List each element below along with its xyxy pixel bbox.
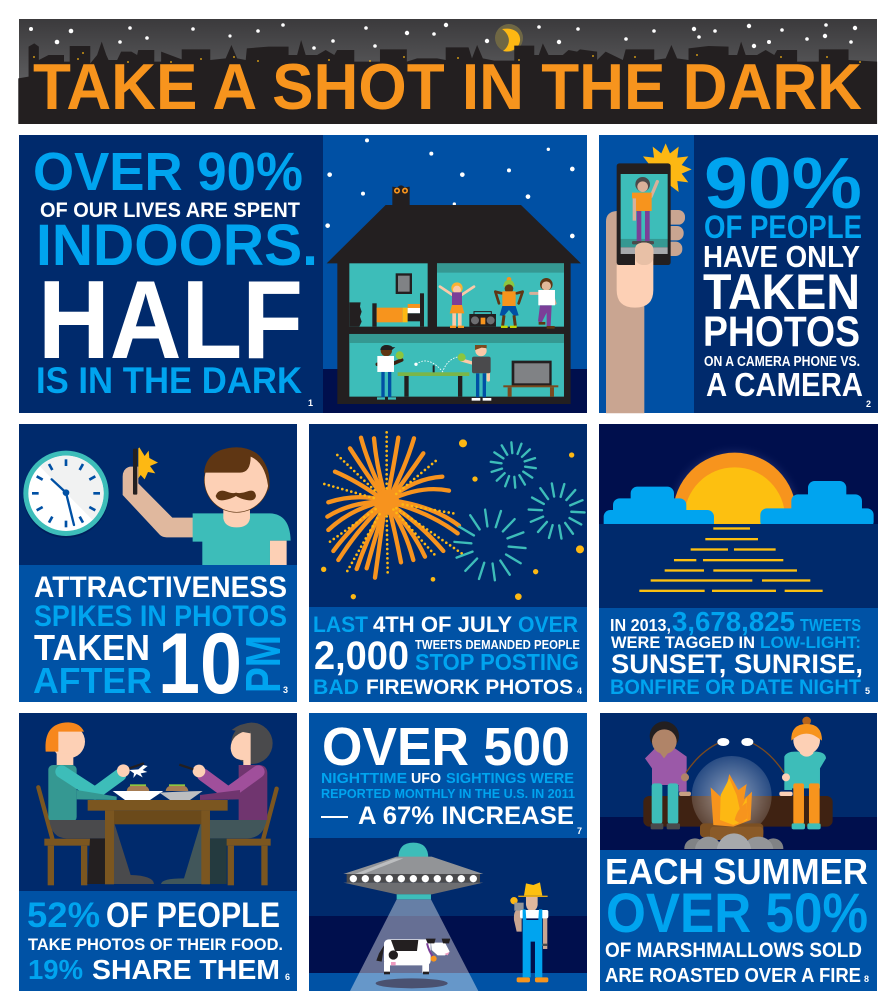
flash burst — [640, 143, 692, 195]
panel 7 text: NIGHTTIME — [321, 771, 407, 787]
panel 8 text: OF MARSHMALLOWS SOLD — [605, 939, 862, 962]
stars — [29, 23, 857, 50]
panel 3 text: 10 — [158, 616, 242, 712]
panel 2 text: 2 — [866, 399, 871, 409]
house — [327, 205, 581, 404]
panel 4 text: FIREWORK PHOTOS — [366, 675, 573, 699]
reflection lines — [639, 527, 823, 592]
panel 2: camera phone — [599, 135, 878, 413]
dinner illustration — [38, 722, 277, 885]
panel 2 text: PHOTOS — [703, 308, 860, 356]
UFO — [343, 843, 483, 899]
torso — [193, 513, 291, 565]
icon: crescent moon — [495, 24, 523, 52]
sun — [674, 450, 796, 524]
panel 1 text: OF OUR LIVES ARE SPENT — [40, 199, 300, 222]
panel 5 text: 3,678,825 — [672, 606, 795, 637]
panel 1 text: INDOORS. — [36, 213, 318, 278]
light beam — [350, 899, 478, 991]
dancing girl — [440, 282, 474, 328]
panel 8 text: OVER 50% — [606, 881, 868, 944]
rooms — [349, 263, 564, 397]
panel 8 text: 8 — [864, 974, 869, 984]
fire glow — [692, 756, 772, 836]
ping pong table — [398, 357, 469, 397]
panel 1 text: HALF — [38, 258, 303, 382]
fireworks illustration — [321, 432, 586, 600]
panel 6 text — [27, 896, 290, 985]
yellow sparks — [321, 439, 584, 600]
selfie person — [632, 177, 657, 244]
icon: wall clock — [23, 451, 109, 538]
teal bursts — [451, 440, 586, 583]
panel 5 text: TWEETS — [800, 615, 861, 635]
icon: boombox — [469, 312, 496, 327]
panel 2 text: HAVE ONLY — [703, 239, 860, 274]
panel 3 text: AFTER — [33, 660, 152, 701]
panel 3 text: PM — [237, 635, 291, 693]
plates of food — [113, 784, 203, 800]
panel 6 text: 19% — [28, 954, 83, 985]
woman diner — [161, 723, 273, 884]
panel 6 text: 6 — [285, 972, 290, 982]
night stars — [325, 138, 575, 238]
panel 4 text: OVER — [518, 612, 578, 637]
phone — [617, 163, 671, 265]
neck — [223, 503, 250, 527]
panel 5 text — [610, 606, 870, 699]
head — [204, 447, 270, 513]
icon: owl — [392, 185, 410, 206]
sunset illustration — [599, 443, 878, 592]
panel 6 text: SHARE THEM — [92, 954, 280, 985]
flash spark — [129, 765, 148, 778]
table — [88, 800, 228, 884]
panel 7 text: A 67% INCREASE — [358, 802, 574, 830]
panel 5: sunset — [599, 424, 878, 702]
panel 3 text: ATTRACTIVENESS — [34, 571, 287, 604]
panel 4 text: BAD — [313, 675, 359, 699]
panel 4 text — [313, 612, 582, 699]
television — [503, 361, 558, 397]
panel 2 text: ON A CAMERA PHONE VS. — [704, 354, 860, 370]
panel 1 text — [33, 142, 318, 408]
panel 5 text: 5 — [865, 686, 870, 696]
fingers — [665, 210, 685, 256]
arm and hand — [123, 467, 194, 537]
clouds — [604, 481, 874, 530]
dotted yellow rays — [324, 432, 462, 572]
flames — [711, 774, 752, 827]
person left — [645, 721, 729, 829]
panel 7 text: UFO — [411, 771, 441, 787]
panel 6 text: 52% — [27, 896, 100, 935]
panel 8: campfire — [600, 713, 877, 991]
orange burst — [327, 438, 459, 578]
panel 5 text: WERE TAGGED IN — [611, 633, 755, 652]
panel 7 text: REPORTED MONTHLY IN THE U.S. IN 2011 — [321, 786, 575, 801]
person right — [741, 717, 826, 829]
panel 1 text: IS IN THE DARK — [36, 360, 302, 401]
panel 8 text: ARE ROASTED OVER A FIRE — [605, 964, 861, 987]
panel 2 text: TAKEN — [703, 264, 860, 320]
panel 8 text: EACH SUMMER — [605, 851, 868, 892]
panel 3 text: SPIKES IN PHOTOS — [34, 600, 287, 633]
campfire illustration — [643, 716, 833, 849]
hand with phone illustration — [606, 143, 692, 413]
panel 1 text: OVER 90% — [33, 142, 303, 202]
farmer — [510, 882, 548, 982]
phone — [133, 449, 137, 495]
burst core — [374, 490, 399, 515]
selfie man illustration — [23, 447, 291, 565]
chairs — [38, 787, 277, 885]
panel 7 text: 7 — [577, 826, 582, 836]
panel 6 text: TAKE PHOTOS OF THEIR FOOD. — [28, 935, 283, 954]
panel 3 text: TAKEN — [34, 627, 150, 668]
panel 3 text — [33, 571, 291, 712]
bedroom furniture — [349, 273, 424, 327]
panel 8 text — [605, 851, 869, 987]
city skyline — [18, 40, 877, 124]
rocks — [684, 833, 784, 849]
panel 5 text: SUNSET, SUNRISE, — [611, 649, 863, 679]
panel 5 text: IN 2013, — [610, 615, 671, 635]
panel 3: attractiveness — [19, 424, 297, 712]
panel 4 text: 2,000 — [314, 634, 409, 678]
panel 2 text — [703, 144, 871, 409]
panel 7: UFO — [309, 713, 587, 991]
house illustration — [325, 138, 581, 404]
man diner — [45, 722, 154, 884]
dancing man in white shirt — [531, 278, 555, 329]
bench log — [643, 796, 833, 827]
player with cap — [377, 345, 404, 400]
panel 4 text: LAST — [313, 612, 369, 637]
thumb and palm — [617, 243, 653, 308]
firewood — [700, 823, 763, 840]
forearm — [606, 211, 644, 413]
panel 4 text: TWEETS DEMANDED PEOPLE — [415, 638, 580, 652]
flash — [138, 447, 158, 479]
panel 7 text — [321, 717, 582, 836]
panel 2 text: A CAMERA — [706, 366, 863, 403]
panel 2 text: 90% — [704, 144, 862, 224]
UFO scene illustration — [343, 843, 548, 991]
panel 5 text: LOW-LIGHT: — [760, 633, 861, 652]
panel 1: indoors — [19, 135, 587, 413]
player in grey shirt — [458, 345, 491, 401]
panel 4 text: 4TH OF JULY — [373, 612, 512, 637]
panel 7 text: OVER 500 — [322, 717, 570, 777]
panel 3 text: 3 — [283, 685, 288, 695]
title: TAKE A SHOT IN THE DARK — [33, 50, 862, 123]
panel 4: fireworks — [309, 424, 587, 702]
panel 4 text: 4 — [577, 686, 582, 696]
panel 6 text: OF PEOPLE — [106, 896, 280, 935]
panel 6: food — [19, 713, 297, 991]
panel 4 text: STOP POSTING — [415, 649, 579, 675]
header banner — [18, 19, 877, 124]
panel 1 text: 1 — [308, 398, 313, 408]
panel 7 text: SIGHTINGS WERE — [446, 771, 574, 787]
dancing man in green hat — [495, 277, 523, 328]
panel 2 text: OF PEOPLE — [704, 209, 862, 245]
panel 5 text: BONFIRE OR DATE NIGHT — [610, 676, 861, 699]
cow — [376, 939, 450, 974]
